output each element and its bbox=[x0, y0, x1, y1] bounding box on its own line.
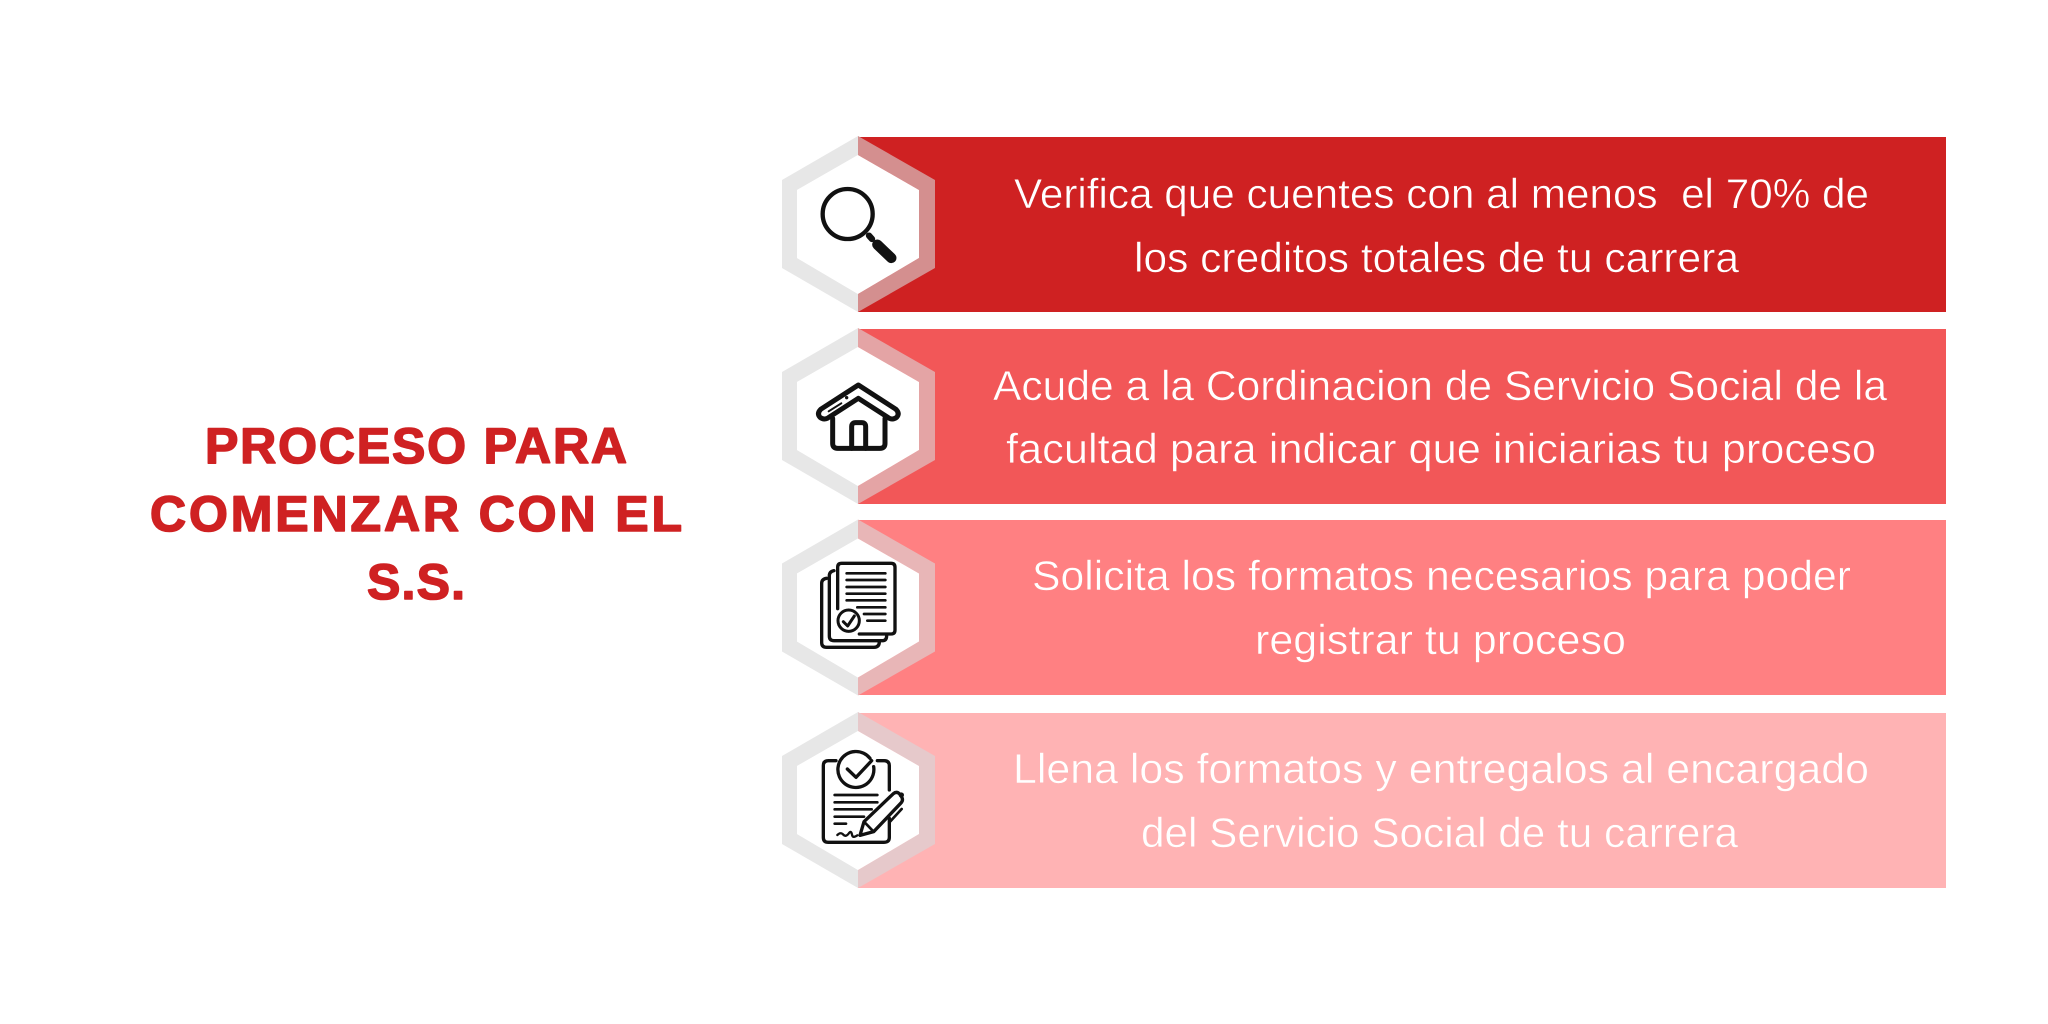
panel: step 1 bbox=[782, 136, 1946, 312]
icon: documents bbox=[822, 563, 895, 647]
bar: step 2 bbox=[858, 329, 1946, 504]
text: step 4: Llena los formatos y entregalos al encargado bbox=[1013, 745, 1869, 792]
title: S.S. bbox=[367, 554, 465, 610]
text: step 4 bbox=[1013, 745, 1869, 856]
bar: step 3 bbox=[858, 520, 1946, 695]
title: PROCESO PARA bbox=[205, 418, 627, 474]
icon: magnifying glass bbox=[823, 189, 891, 258]
bar: step 1 bbox=[858, 137, 1946, 312]
bar: step 4 bbox=[858, 713, 1946, 888]
hexagon: step 2 bbox=[782, 328, 935, 504]
text: step 3 bbox=[1032, 552, 1851, 663]
hexagon: step 1 bbox=[782, 136, 935, 312]
text: step 3: Solicita los formatos necesarios para poder bbox=[1032, 552, 1851, 599]
title bbox=[150, 418, 682, 610]
text: step 2 bbox=[993, 362, 1888, 472]
panel: step 3 bbox=[782, 520, 1946, 696]
text: step 1: los creditos totales de tu carrera bbox=[1134, 234, 1740, 281]
panel: step 4 bbox=[782, 712, 1946, 888]
text: step 2: facultad para indicar que iniciarias tu proceso bbox=[1006, 425, 1876, 472]
panel: step 2 bbox=[782, 328, 1946, 504]
title: COMENZAR CON EL bbox=[150, 486, 682, 542]
text: step 1: Verifica que cuentes con al menos el 70% de bbox=[1014, 170, 1869, 217]
icon: signed form bbox=[823, 752, 904, 842]
text: step 2: Acude a la Cordinacion de Servicio Social de la bbox=[993, 362, 1888, 409]
text: step 4: del Servicio Social de tu carrera bbox=[1141, 809, 1739, 856]
hexagon: step 4 bbox=[782, 712, 935, 888]
text: step 1 bbox=[1014, 170, 1869, 281]
icon: house bbox=[818, 385, 898, 448]
hexagon: step 3 bbox=[782, 520, 935, 696]
text: step 3: registrar tu proceso bbox=[1255, 616, 1626, 663]
